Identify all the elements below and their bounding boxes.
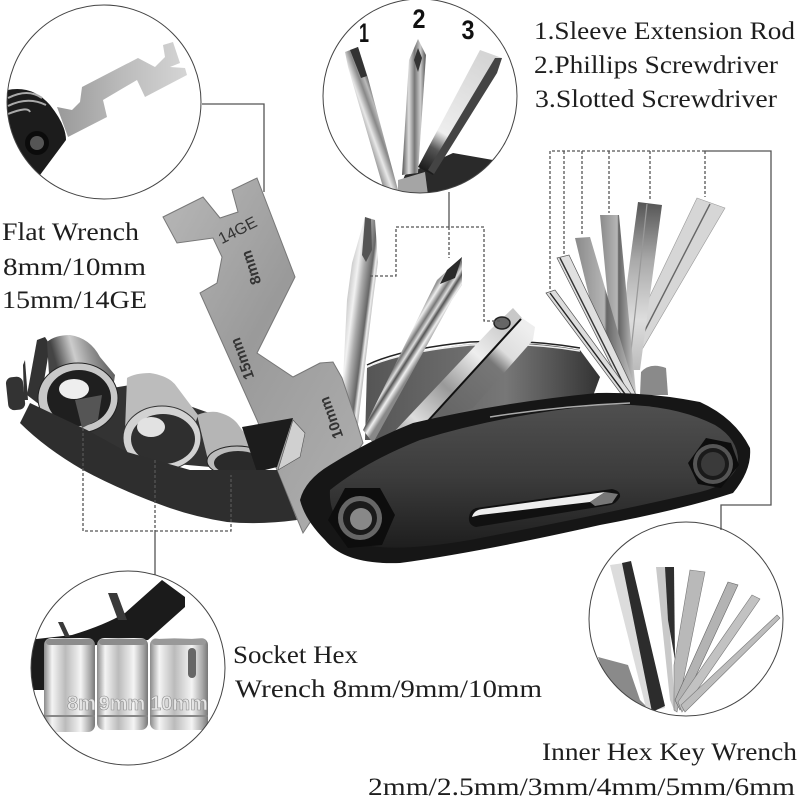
inset tool 3 bbox=[418, 50, 502, 175]
inset tool 1 bbox=[345, 47, 398, 190]
inset circle: screwdrivers detail bbox=[323, 0, 517, 195]
inset back bbox=[598, 657, 646, 707]
inset wrench bbox=[57, 42, 187, 137]
inset key 2.5mm bbox=[678, 595, 760, 712]
left bolt bbox=[328, 488, 395, 548]
label: inner hex key wrench bbox=[368, 739, 798, 800]
inset handle bbox=[8, 89, 66, 174]
inset key 2mm bbox=[681, 615, 780, 712]
handle slot bbox=[469, 489, 620, 527]
main tool: black handle bbox=[300, 393, 750, 563]
inset tool 2 bbox=[402, 39, 426, 175]
inset spring bbox=[8, 93, 46, 114]
main tool: hex key set bbox=[546, 198, 725, 395]
label: inner hex key wrench: Inner Hex Key Wrench bbox=[542, 739, 798, 766]
engraved 15mm: 15mm bbox=[227, 335, 258, 382]
main tool: rear plate bbox=[365, 341, 600, 440]
inset socket 9mm: 9mm bbox=[99, 693, 145, 715]
label: flat wrench bbox=[2, 219, 147, 314]
inset key 3mm bbox=[675, 582, 738, 710]
label: screwdriver list: 3.Slotted Screwdriver bbox=[535, 86, 778, 113]
label: flat wrench: Flat Wrench bbox=[2, 219, 140, 246]
inset socket 8mm bbox=[44, 638, 96, 732]
callout leader: screwdrivers dashed bbox=[370, 227, 500, 321]
label: flat wrench: 15mm/14GE bbox=[2, 287, 147, 314]
inset base silver bbox=[398, 172, 428, 192]
number 3: 3 bbox=[462, 15, 474, 45]
inset bolt bbox=[25, 131, 49, 155]
label: socket hex wrench: Wrench 8mm/9mm/10mm bbox=[235, 676, 543, 703]
main tool: silver strip bbox=[278, 420, 305, 470]
main tool: dark wedge bbox=[242, 418, 293, 472]
inset key 5mm bbox=[656, 567, 675, 712]
label: screwdriver list bbox=[534, 18, 796, 113]
callout leader: hex keys dashed bbox=[550, 151, 705, 290]
engraved 8mm: 8mm bbox=[238, 248, 265, 287]
label: flat wrench: 8mm/10mm bbox=[3, 254, 147, 281]
inset band bbox=[28, 580, 185, 690]
main tool: socket handle band bbox=[20, 403, 297, 523]
main tool: Phillips screwdriver bbox=[363, 257, 462, 443]
callout leader: sockets dashed bbox=[83, 428, 231, 531]
number 1: 1 bbox=[359, 18, 369, 48]
number 2: 2 bbox=[412, 4, 426, 34]
main tool: flat wrench bbox=[163, 178, 363, 533]
inset socket 8mm: 8m bbox=[67, 693, 96, 715]
inset key 4mm bbox=[674, 570, 705, 712]
main tool: socket 1 bbox=[38, 335, 118, 433]
callout leader: flat wrench bbox=[202, 104, 264, 192]
inset base bbox=[404, 153, 492, 192]
inset socket 10mm: 10mm bbox=[150, 693, 208, 715]
inset circle: flat wrench detail bbox=[0, 5, 201, 199]
label: socket hex wrench bbox=[233, 642, 543, 703]
engraved 14GE: 14GE bbox=[216, 214, 260, 248]
main tool: slotted screwdriver bbox=[342, 217, 378, 424]
label: socket hex wrench: Socket Hex bbox=[233, 642, 359, 669]
inset circle: socket hex detail bbox=[28, 571, 225, 765]
main tool: handle prongs bbox=[5, 337, 245, 470]
inset socket 9mm bbox=[97, 638, 148, 730]
engraved 10mm: 10mm bbox=[316, 394, 347, 441]
main tool: socket 2 bbox=[123, 373, 201, 470]
label: screwdriver list: 1.Sleeve Extension Rod bbox=[534, 18, 796, 45]
callout leader: hex keys solid bbox=[705, 151, 771, 530]
inset pins bbox=[58, 593, 127, 637]
right bolt bbox=[688, 438, 739, 488]
inset circle: hex key detail bbox=[589, 522, 783, 720]
main tool: sleeve extension rod bbox=[393, 308, 535, 433]
callout leader: sockets solid bbox=[154, 531, 156, 575]
main tool: socket 3 bbox=[197, 412, 267, 476]
inset socket 10mm bbox=[150, 638, 208, 730]
label: screwdriver list: 2.Phillips Screwdriver bbox=[534, 52, 779, 79]
inset key 6mm bbox=[610, 561, 665, 712]
callout leader: screwdrivers solid bbox=[448, 192, 450, 227]
